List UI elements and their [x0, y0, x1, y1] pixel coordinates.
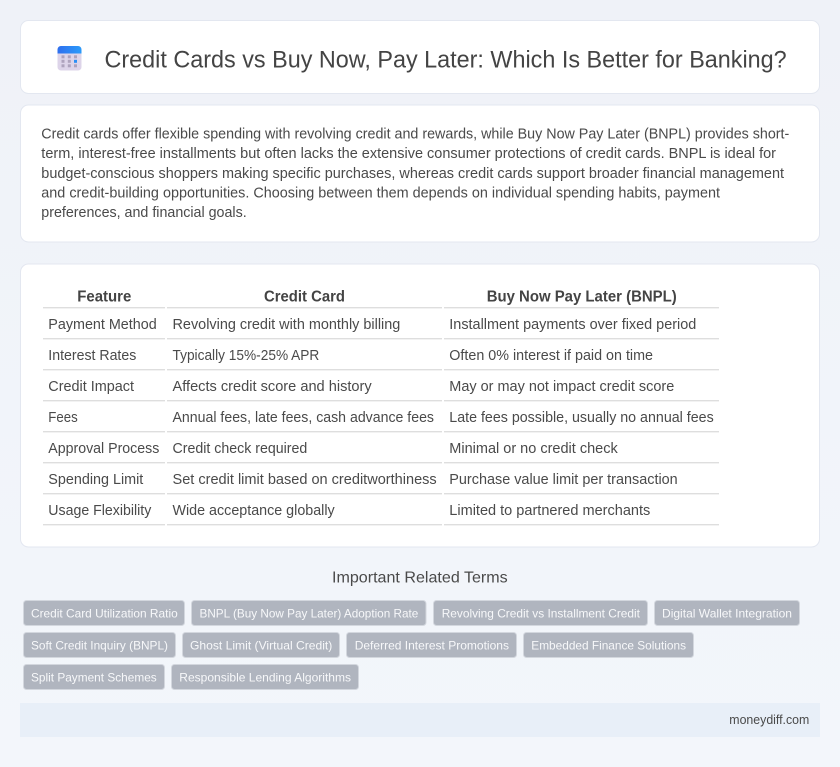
row: payment method: Payment Method — [48, 317, 157, 333]
text block: description: budget-conscious shoppers making specific purchases, whereas credit cards support broader financial management — [41, 166, 784, 182]
panel: related term tags: Embedded Finance Solutions — [531, 638, 686, 652]
row: spending limit — [48, 472, 678, 488]
panel: related term tags: BNPL (Buy Now Pay Later) Adoption Rate — [200, 606, 419, 620]
row: credit impact: May or may not impact credit score — [449, 379, 674, 395]
icon: calendar — [58, 46, 82, 70]
title: Credit Cards vs Buy Now, Pay Later: Which Is Better for Banking? — [104, 46, 787, 74]
text block: description: preferences, and financial goals. — [41, 205, 247, 221]
footer — [20, 703, 820, 737]
text block: description: and credit-building opportunities. Choosing between them depends on individual spending habits, payment — [41, 186, 720, 202]
row: spending limit: Purchase value limit per transaction — [449, 472, 678, 488]
row: credit impact — [48, 379, 674, 395]
row: approval process: Credit check required — [172, 441, 307, 457]
panel: related term tags: Ghost Limit (Virtual Credit) — [190, 638, 332, 652]
row: approval process — [48, 441, 619, 457]
footer: moneydiff.com — [729, 713, 809, 727]
text block: description: term, interest-free installments but often lacks the extensive consumer protections of credit cards. BNPL is ideal for — [41, 146, 776, 162]
row: interest rates: Typically 15%-25% APR — [172, 348, 319, 364]
row: fees: Annual fees, late fees, cash advance fees — [172, 410, 434, 426]
row: spending limit: Set credit limit based on creditworthiness — [172, 472, 437, 488]
panel: title card — [20, 20, 820, 94]
table header row — [77, 288, 677, 306]
row: usage flexibility: Limited to partnered merchants — [449, 503, 650, 519]
panel: related term tags: Digital Wallet Integration — [662, 606, 792, 620]
row: spending limit: Spending Limit — [48, 472, 143, 488]
row: usage flexibility: Usage Flexibility — [48, 503, 152, 519]
text block: description — [41, 126, 790, 221]
row: credit impact: Affects credit score and history — [172, 379, 373, 395]
row: interest rates: Often 0% interest if paid on time — [449, 348, 653, 364]
row: usage flexibility — [48, 503, 650, 519]
panel: related term tags: Soft Credit Inquiry (BNPL) — [31, 638, 168, 652]
panel: related term tags — [24, 600, 800, 690]
row: interest rates — [48, 348, 653, 364]
text block: description: Credit cards offer flexible spending with revolving credit and rewards, while Buy Now Pay Later (BNPL) provides short- — [41, 126, 790, 142]
panel: comparison table card — [20, 264, 820, 547]
heading: related terms: Important Related Terms — [332, 570, 508, 587]
panel: related term tags: Revolving Credit vs Installment Credit — [442, 606, 641, 620]
row: credit impact: Credit Impact — [48, 379, 134, 395]
row: approval process: Minimal or no credit check — [449, 441, 619, 457]
row: payment method: Revolving credit with monthly billing — [172, 317, 400, 333]
panel: related term tags: Split Payment Schemes — [31, 670, 157, 684]
panel: related term tags: Deferred Interest Promotions — [355, 638, 509, 652]
table header row: Credit Card — [264, 288, 345, 306]
row: fees — [48, 410, 714, 426]
row: usage flexibility: Wide acceptance globally — [172, 503, 335, 519]
row: approval process: Approval Process — [48, 441, 159, 457]
row: payment method — [48, 317, 696, 333]
panel: related term tags: Credit Card Utilization Ratio — [31, 606, 178, 620]
row: payment method: Installment payments over fixed period — [449, 317, 696, 333]
panel: description card — [20, 105, 820, 242]
row: fees: Late fees possible, usually no annual fees — [449, 410, 714, 426]
table: comparison of credit cards and BNPL — [43, 288, 719, 525]
row: interest rates: Interest Rates — [48, 348, 136, 364]
row: fees: Fees — [48, 410, 78, 426]
table header row: Feature — [77, 288, 132, 306]
panel: related term tags: Responsible Lending Algorithms — [179, 670, 351, 684]
table header row: Buy Now Pay Later (BNPL) — [487, 288, 677, 306]
